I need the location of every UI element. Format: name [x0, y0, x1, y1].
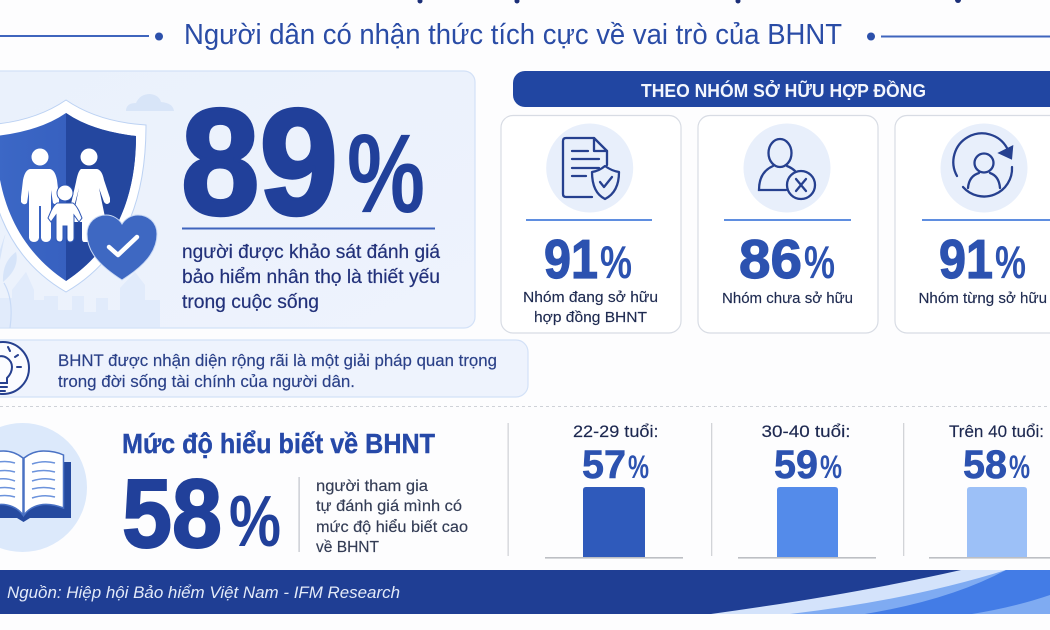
icon: person with cycle arrow	[953, 133, 1012, 197]
big number 89%: %	[347, 111, 425, 236]
card: former owners	[895, 116, 1050, 333]
icon: light bulb	[0, 342, 29, 394]
card: non-owners: 86	[739, 228, 802, 290]
bar: age 22-29: 22-29 tuổi:	[573, 423, 658, 441]
header: contract ownership: THEO NHÓM SỞ HỮU HỢP ĐỒNG	[641, 80, 926, 101]
card: non-owners: %	[804, 236, 835, 288]
card: former owners: 91	[939, 228, 993, 290]
knowledge description: mức độ hiểu biết cao	[316, 519, 468, 536]
description: người được khảo sát đánh giá	[182, 242, 440, 263]
card: current owners	[501, 116, 681, 333]
header: contract ownership	[513, 71, 1050, 107]
description: trong cuộc sống	[182, 292, 319, 313]
card: current owners: 91	[544, 228, 598, 290]
callout: key insight: BHNT được nhận diện rộng rãi là một giải pháp quan trọng	[58, 352, 497, 370]
card: current owners: %	[600, 236, 632, 288]
panel: 89% essential	[0, 71, 475, 328]
big number 89%: 89	[181, 77, 338, 246]
card: former owners: Nhóm từng sở hữu	[918, 290, 1047, 307]
subtitle with side rules: Người dân có nhận thức tích cực về vai trò của BHNT	[184, 19, 842, 51]
bar: age over 40: Trên 40 tuổi:	[949, 423, 1044, 441]
callout: key insight: trong đời sống tài chính của người dân.	[58, 373, 355, 391]
knowledge description: người tham gia	[316, 478, 428, 495]
bar: age 22-29	[545, 423, 683, 559]
icon: cloud	[126, 94, 174, 111]
bar: age 22-29: %	[628, 449, 649, 485]
bar: age 22-29: 57	[582, 443, 626, 487]
callout: key insight	[0, 340, 528, 397]
big number 58%: %	[229, 482, 281, 562]
subtitle with side rules	[0, 19, 1050, 51]
icon: person with x	[759, 139, 815, 199]
city and leaf background	[0, 234, 160, 328]
heading: knowledge level: Mức độ hiểu biết về BHNT	[122, 428, 435, 459]
description	[182, 242, 440, 313]
card: non-owners	[698, 116, 878, 333]
card: former owners: %	[995, 236, 1026, 288]
description: bảo hiểm nhân thọ là thiết yếu	[182, 267, 440, 288]
card: current owners: Nhóm đang sở hữu	[523, 289, 658, 306]
bar: age 30-40: %	[820, 449, 842, 485]
bar: age over 40: 58	[963, 443, 1007, 487]
icon: heart check	[87, 215, 157, 280]
card: current owners: hợp đồng BHNT	[534, 309, 647, 326]
knowledge description	[316, 478, 468, 556]
bar: age 30-40	[738, 423, 876, 559]
cropped title descenders	[418, 0, 961, 4]
bar: age over 40: %	[1009, 449, 1030, 485]
icon: document shield	[563, 138, 619, 199]
bar: age over 40	[929, 423, 1050, 559]
icon: open book	[0, 423, 87, 552]
knowledge description: tự đánh giá mình có	[316, 498, 462, 515]
footer: source band	[0, 570, 1050, 614]
bar: age 30-40: 59	[774, 443, 818, 487]
big number 89%	[181, 77, 425, 246]
icon: family shield	[0, 100, 146, 292]
big number 58%	[122, 459, 281, 568]
bar: age 30-40: 30-40 tuổi:	[762, 423, 850, 441]
card: non-owners: Nhóm chưa sở hữu	[722, 290, 853, 307]
footer: source band: Nguồn: Hiệp hội Bảo hiểm Việt Nam - IFM Research	[7, 583, 400, 602]
knowledge description: về BHNT	[316, 539, 380, 556]
big number 58%: 58	[122, 459, 222, 568]
